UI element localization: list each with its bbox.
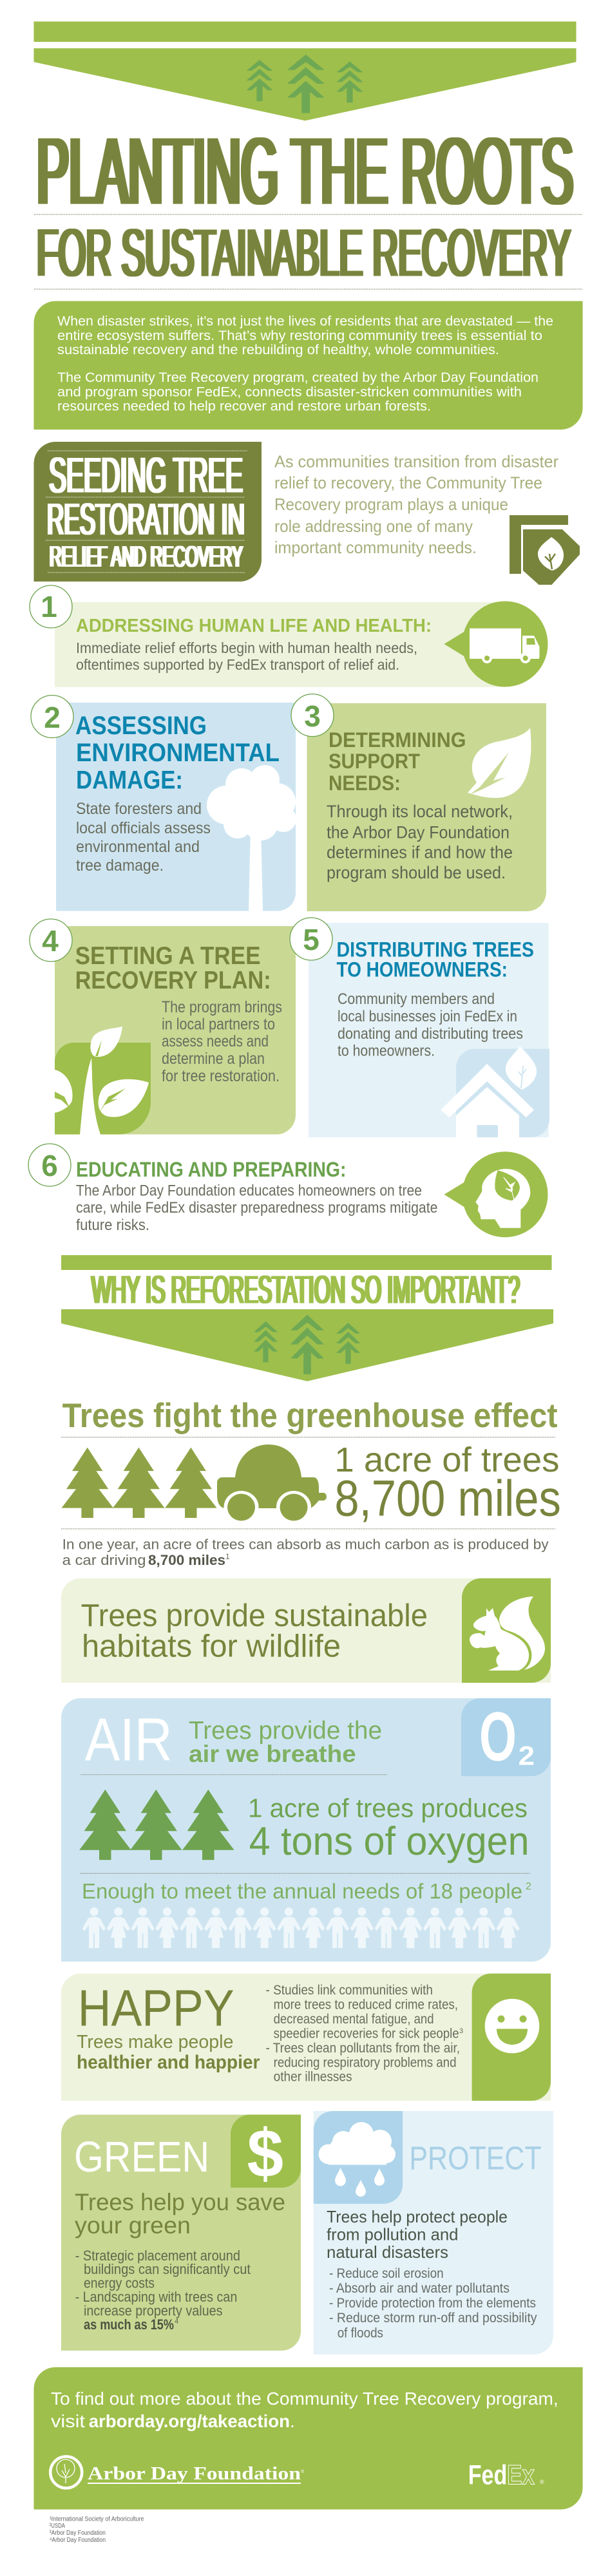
footnotes: ⁴Arbor Day Foundation: [50, 2537, 106, 2544]
text: call to action: [51, 2389, 558, 2431]
text: seeding intro: relief to recovery, the Community Tree: [274, 473, 542, 492]
panel: happy: [61, 1973, 551, 2101]
text: seeding intro: [274, 452, 558, 557]
icon: tree: [207, 765, 296, 911]
text: carbon: In one year, an acre of trees can absorb as much carbon as is produced by: [62, 1537, 549, 1553]
badge: 5: [290, 918, 332, 960]
icon: trees: [79, 1790, 234, 1860]
logo: Arbor Day Foundation: [50, 2456, 305, 2488]
heading: step 4: [75, 942, 271, 994]
text: step 4: in local partners to: [162, 1016, 275, 1034]
text: happy bullets: - Studies link communities with: [265, 1983, 433, 1998]
text: step 3: Through its local network,: [327, 802, 513, 821]
heading: step 3: SUPPORT: [329, 750, 420, 773]
text: step 4: determine a plan: [162, 1050, 265, 1068]
text: wildlife: Trees provide sustainable: [81, 1598, 428, 1633]
logo: FedEx: Ex: [507, 2460, 535, 2491]
heading: step 5: DISTRIBUTING TREES: [336, 938, 534, 961]
text: seeding intro: As communities transition from disaster: [274, 452, 558, 471]
text: save your green: [75, 2189, 285, 2239]
text: green bullets: as much as 15%: [84, 2316, 174, 2333]
text: step 4: The program brings: [162, 998, 282, 1016]
icon: smiley: [472, 1973, 551, 2101]
text: trees provide the air we breathe: air we breathe: [189, 1741, 356, 1767]
heading: protect: PROTECT: [409, 2139, 542, 2177]
text: step 5: donating and distributing trees: [338, 1025, 523, 1043]
text: trees help protect: natural disasters: [327, 2242, 448, 2262]
header banner: [33, 21, 576, 120]
text: trees help protect: Trees help protect people: [327, 2207, 508, 2226]
text: step 1: [76, 639, 417, 673]
text: trees help protect: from pollution and: [327, 2224, 459, 2244]
panel: step 6: [28, 1144, 548, 1237]
text: enough for 18 people: 2: [526, 1881, 531, 1892]
heading: happy: HAPPY: [78, 1980, 234, 2037]
panel: wildlife: [61, 1578, 551, 1683]
text: step 6: [76, 1182, 438, 1234]
text: call to action: .: [290, 2411, 295, 2431]
panel: seeding tree restoration: RESTORATION IN: [47, 494, 245, 544]
badge: 2: 2: [44, 701, 61, 734]
panel: seeding tree restoration: SEEDING TREE: [49, 447, 243, 504]
badge: 3: 3: [304, 699, 321, 733]
heading: step 2: [75, 712, 280, 795]
text: call to action: visit: [51, 2411, 85, 2431]
heading: step 2: DAMAGE:: [76, 766, 183, 795]
icon: leaf: [468, 728, 531, 798]
text: step 6: future risks.: [76, 1217, 149, 1234]
panel: seeding tree restoration: RELIEF AND RECOVERY: [50, 540, 243, 573]
text: carbon: 8,700 miles: [148, 1552, 225, 1568]
heading: step 3: [329, 728, 466, 795]
panel: intro: When disaster strikes, it’s not just the lives of residents that are devastated — the: [57, 314, 553, 329]
logo: FedEx: ®: [540, 2479, 544, 2485]
heading: step 6: EDUCATING AND PREPARING:: [76, 1158, 347, 1181]
heading: green: GREEN: [74, 2133, 209, 2181]
text: green bullets: energy costs: [84, 2275, 155, 2291]
text: step 1: Immediate relief efforts begin with human health needs,: [76, 639, 417, 656]
text: healthier and happier: healthier and happier: [77, 2052, 260, 2073]
text: happy bullets: - Trees clean pollutants from the air,: [265, 2041, 460, 2056]
text: protect bullets: - Provide protection from the elements: [329, 2296, 536, 2311]
text: green bullets: increase property values: [84, 2303, 223, 2318]
panel: intro: sustainable recovery and the rebuilding of healthy, whole communities.: [57, 343, 499, 357]
text: trees help protect: [327, 2207, 508, 2262]
icon: leaf badge: [510, 515, 580, 585]
text: happy bullets: other illnesses: [274, 2070, 352, 2084]
icon: dollar: [231, 2115, 301, 2192]
text: green bullets: buildings can significantly cut: [84, 2261, 251, 2277]
text: step 2: tree damage.: [76, 857, 164, 875]
text: step 4: assess needs and: [162, 1032, 269, 1050]
text: protect bullets: [329, 2266, 537, 2340]
icon: squirrel: [462, 1578, 551, 1683]
logo: Arbor Day Foundation: ®: [301, 2469, 305, 2474]
text: step 5: [338, 990, 523, 1060]
text: call to action: To find out more about the Community Tree Recovery program,: [51, 2389, 558, 2409]
text: seeding intro: Recovery program plays a unique: [274, 495, 508, 514]
stat: 4 tons of oxygen: [248, 1794, 529, 1864]
text: step 5: local businesses join FedEx in: [338, 1008, 517, 1025]
text: green bullets: - Landscaping with trees can: [75, 2289, 237, 2305]
logo: FedEx: Fed: [468, 2460, 507, 2491]
text: save your green: your green: [75, 2212, 191, 2239]
panel: protect: [314, 2111, 553, 2354]
text: step 6: The Arbor Day Foundation educates homeowners on tree: [76, 1182, 422, 1200]
panel: intro: and program sponsor FedEx, connects disaster-stricken communities with: [57, 384, 522, 399]
icon: O2: 2: [519, 1741, 535, 1771]
panel: intro: [33, 301, 583, 430]
icon: rain cloud: [314, 2111, 403, 2204]
heading: step 5: [336, 938, 534, 981]
panel: step 5: [290, 918, 549, 1137]
logo: Arbor Day Foundation: Arbor Day Foundation: [88, 2463, 301, 2484]
panel: greenhouse effect: [61, 1397, 561, 1568]
text: step 3: the Arbor Day Foundation: [327, 823, 510, 842]
text: step 3: program should be used.: [327, 863, 506, 882]
text: step 3: [327, 802, 513, 882]
text: happy bullets: [265, 1983, 463, 2084]
text: trees provide the air we breathe: Trees provide the: [189, 1717, 382, 1745]
text: happy bullets: reducing respiratory problems and: [274, 2055, 456, 2070]
badge: 6: [28, 1144, 71, 1186]
text: protect bullets: - Reduce soil erosion: [329, 2266, 444, 2281]
heading: step 2: ASSESSING: [75, 712, 207, 740]
text: green bullets: 4: [175, 2318, 178, 2325]
banner: why reforestation: [61, 1255, 553, 1381]
heading: trees fight the greenhouse effect: Trees fight the greenhouse effect: [62, 1397, 558, 1435]
panel: footer: [33, 2367, 583, 2510]
icon: dollar: $: [247, 2116, 283, 2192]
panel: air: [61, 1698, 551, 1962]
panel: step 1: [30, 585, 548, 687]
icon: truck: [444, 601, 548, 687]
text: healthier and happier: [77, 2032, 260, 2073]
heading: air: AIR: [85, 1706, 173, 1774]
logo: FedEx: [468, 2460, 544, 2491]
text: carbon: 1: [225, 1552, 230, 1561]
text: carbon: [62, 1537, 549, 1568]
text: happy bullets: decreased mental fatigue, and: [274, 2012, 434, 2027]
text: step 5: Community members and: [338, 990, 495, 1008]
text: trees provide the air we breathe: [189, 1717, 382, 1767]
panel: seeding tree restoration: [33, 442, 262, 582]
heading: step 3: NEEDS:: [329, 772, 401, 795]
text: enough for 18 people: Enough to meet the annual needs of 18 people: [82, 1879, 522, 1903]
badge: 1: [30, 585, 72, 628]
text: green bullets: - Strategic placement around: [75, 2248, 240, 2264]
text: protect bullets: - Absorb air and water pollutants: [329, 2281, 510, 2296]
text: step 2: [76, 800, 211, 875]
footnotes: [50, 2515, 144, 2544]
badge: 4: 4: [42, 924, 59, 958]
panel: step 3: [291, 694, 546, 911]
text: wildlife: habitats for wildlife: [82, 1629, 341, 1664]
panel: intro: resources needed to help recover and restore urban forests.: [57, 399, 431, 413]
stat: 8,700 miles: 1 acre of trees: [334, 1441, 559, 1479]
text: step 5: to homeowners.: [338, 1043, 435, 1060]
title: [34, 118, 582, 291]
text: protect bullets: of floods: [338, 2326, 383, 2340]
heading: step 4: SETTING A TREE: [75, 942, 261, 970]
text: seeding intro: important community needs.: [274, 538, 477, 557]
badge: 3: [291, 694, 334, 737]
icon: O2: [461, 1698, 551, 1776]
panel: intro: entire ecosystem suffers. That’s why restoring community trees is essential to: [57, 328, 542, 343]
text: healthier and happier: Trees make people: [77, 2032, 233, 2052]
stat: 4 tons of oxygen: 4 tons of oxygen: [249, 1819, 529, 1864]
icon: O2: O: [479, 1698, 517, 1776]
heading: step 3: DETERMINING: [329, 728, 466, 752]
stat: 8,700 miles: 8,700 miles: [334, 1470, 561, 1527]
heading: step 4: RECOVERY PLAN:: [75, 967, 271, 994]
text: step 2: State foresters and: [76, 800, 202, 818]
text: step 2: local officials assess: [76, 819, 211, 837]
badge: 1: 1: [41, 590, 57, 623]
icon: trees and car: [61, 1444, 327, 1523]
panel: step 2: [31, 696, 296, 911]
panel: intro: The Community Tree Recovery program, created by the Arbor Day Foundation: [57, 370, 539, 385]
text: call to action: arborday.org/takeaction: [89, 2411, 290, 2431]
icon: 18 people: [82, 1908, 520, 1948]
heading: step 5: TO HOMEOWNERS:: [336, 958, 508, 981]
text: carbon: a car driving: [62, 1552, 146, 1568]
text: green bullets: [75, 2248, 251, 2333]
text: step 2: environmental and: [76, 838, 200, 856]
text: wildlife: [81, 1598, 428, 1664]
stat: 8,700 miles: [334, 1441, 561, 1527]
text: step 6: care, while FedEx disaster preparedness programs mitigate: [76, 1199, 438, 1217]
text: step 4: for tree restoration.: [162, 1067, 280, 1085]
badge: 4: [30, 919, 72, 961]
icon: house: [441, 1046, 549, 1137]
text: save your green: Trees help you save: [75, 2189, 285, 2215]
badge: 6: 6: [41, 1149, 58, 1182]
text: step 3: determines if and how the: [327, 842, 513, 862]
text: protect bullets: - Reduce storm run-off and possibility: [329, 2311, 537, 2325]
stat: 4 tons of oxygen: 1 acre of trees produces: [248, 1794, 528, 1823]
text: happy bullets: 3: [459, 2027, 463, 2035]
badge: 5: 5: [303, 923, 319, 956]
heading: step 1: ADDRESSING HUMAN LIFE AND HEALTH:: [76, 616, 432, 636]
footnotes: ³Arbor Day Foundation: [50, 2530, 106, 2537]
panel: green: [61, 2115, 301, 2351]
text: happy bullets: more trees to reduced crime rates,: [274, 1998, 458, 2012]
text: step 4: [162, 998, 282, 1085]
footnotes: ¹International Society of Arboriculture: [50, 2515, 144, 2523]
footnotes: ²USDA: [50, 2523, 65, 2530]
heading: step 2: ENVIRONMENTAL: [76, 739, 280, 767]
icon: head with leaf: [444, 1151, 548, 1237]
icon: plant: [55, 1027, 151, 1135]
text: seeding intro: role addressing one of many: [274, 516, 473, 536]
text: step 1: oftentimes supported by FedEx transport of relief aid.: [76, 656, 399, 673]
panel: step 4: [30, 919, 296, 1135]
text: happy bullets: speedier recoveries for sick people: [274, 2027, 459, 2041]
badge: 2: [31, 696, 73, 738]
